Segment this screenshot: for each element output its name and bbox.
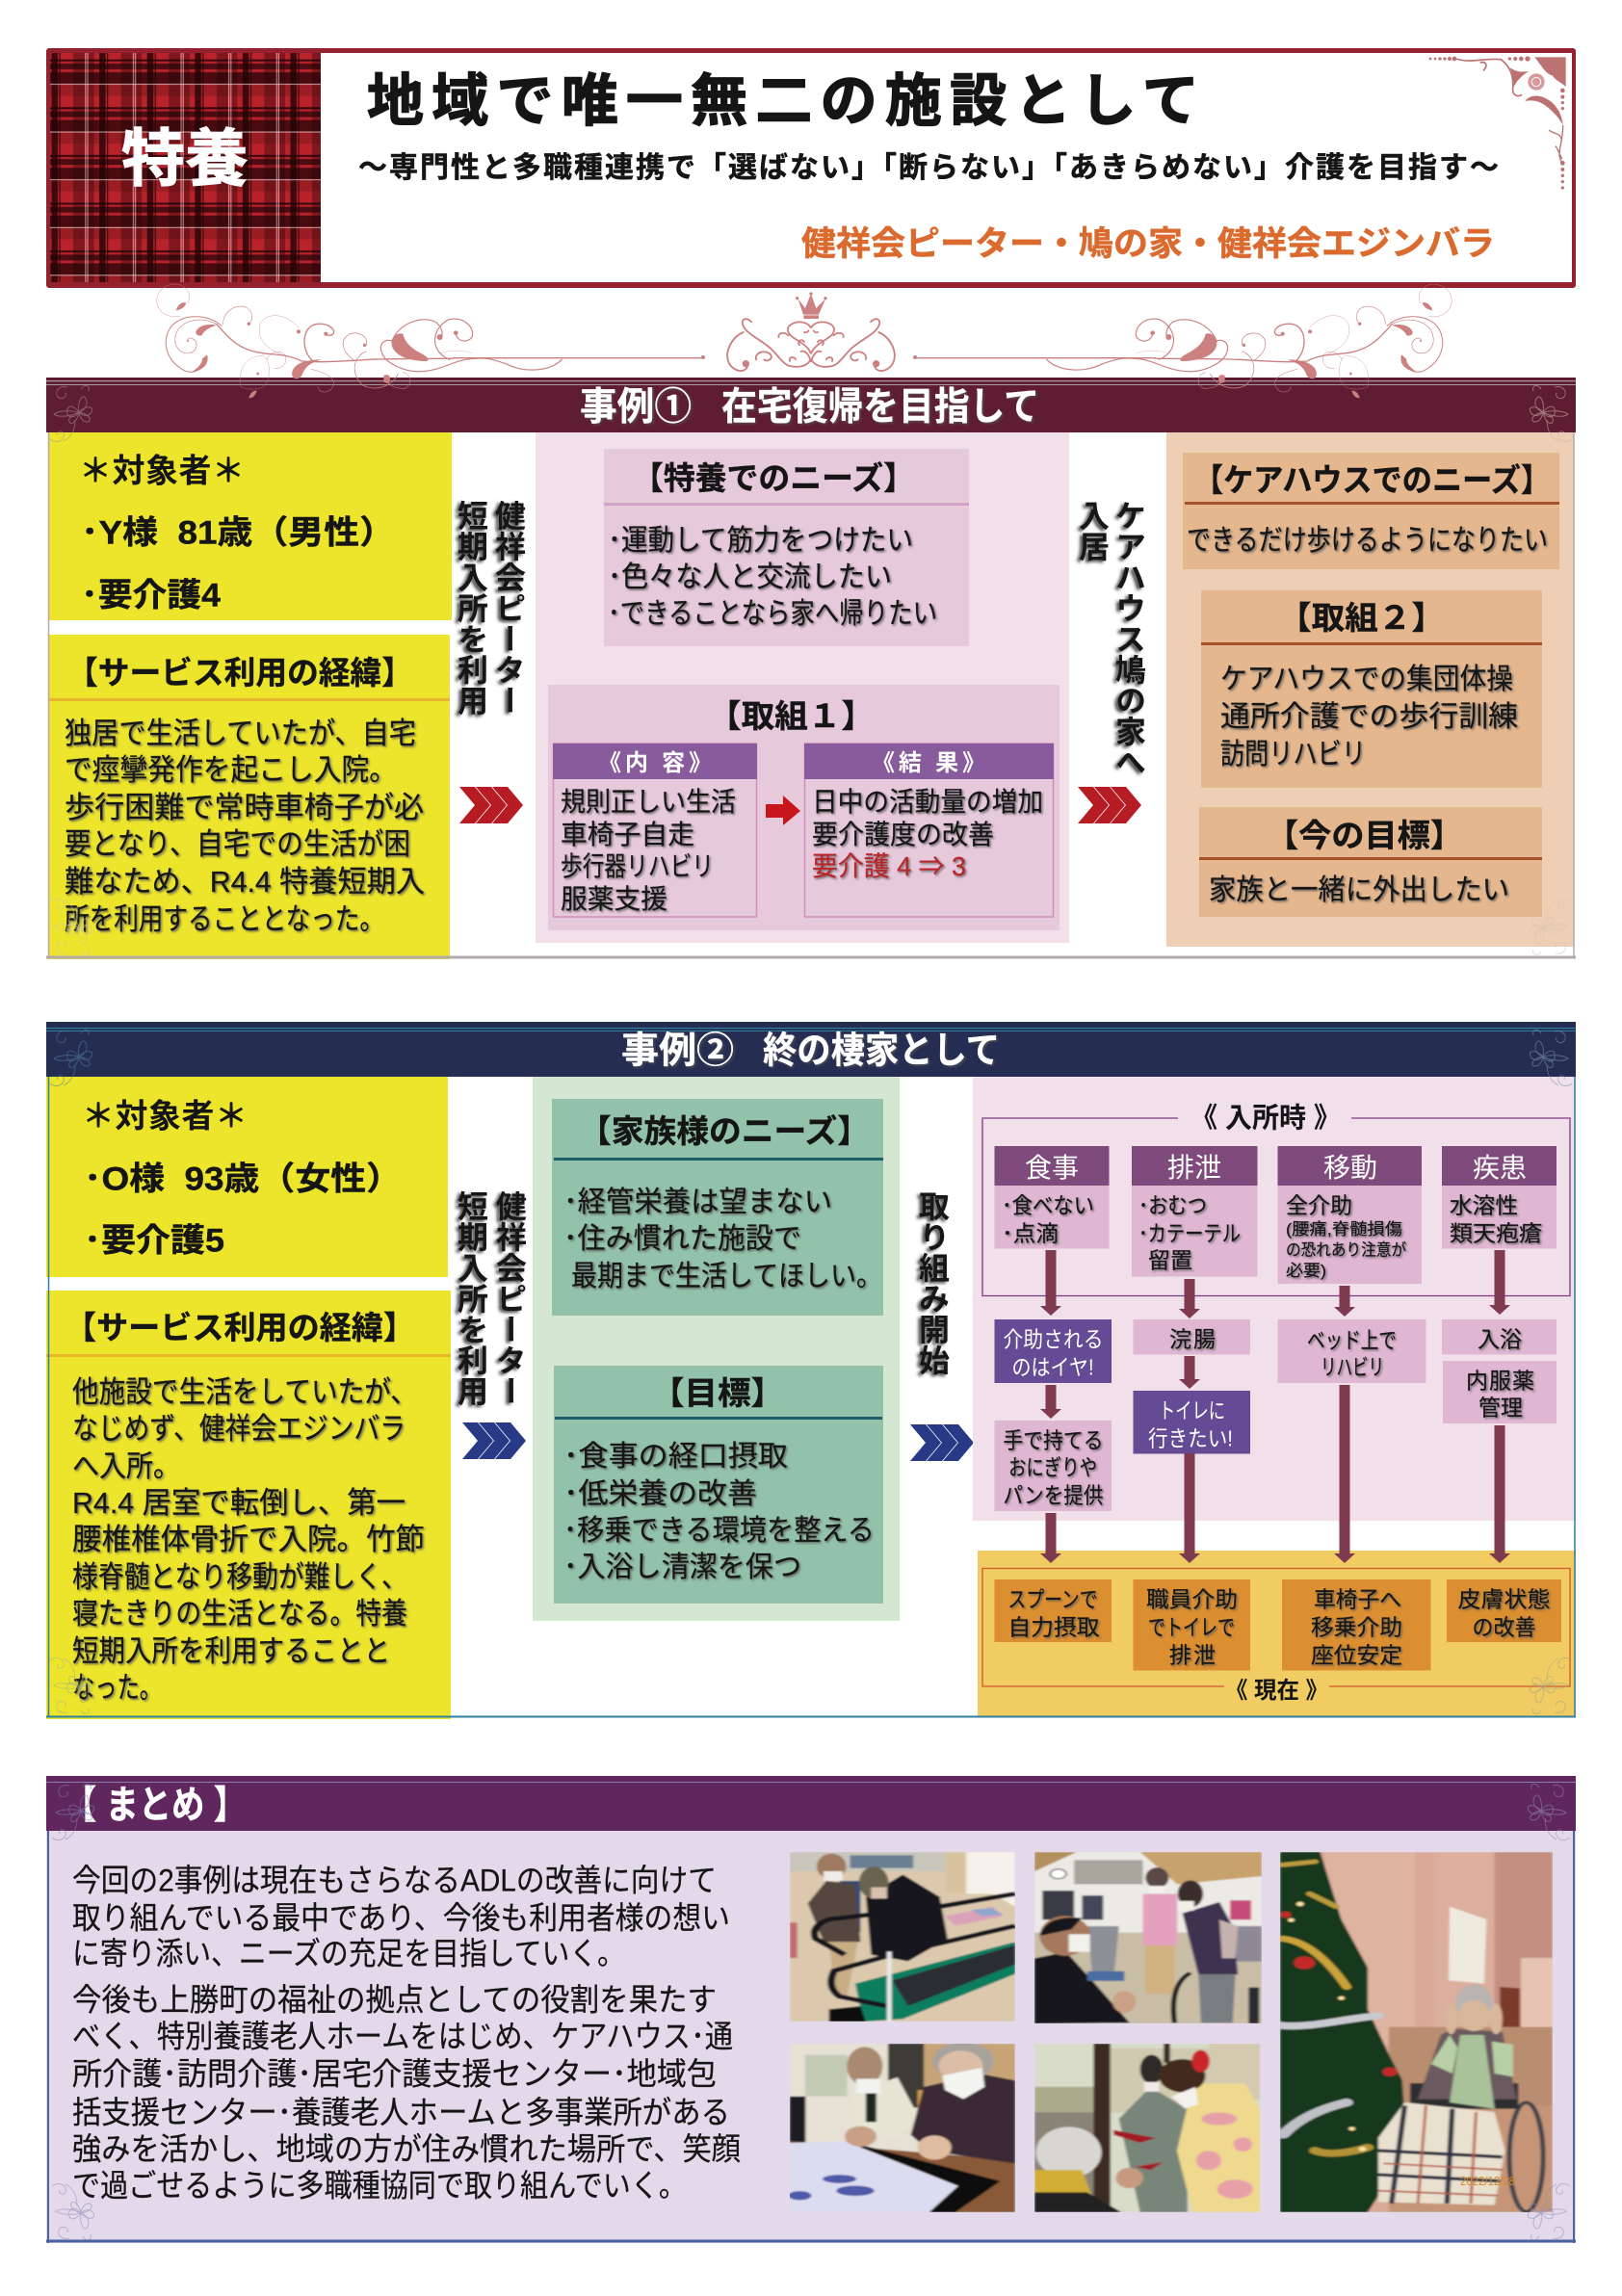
panel: family needs and goals [533,1077,900,1621]
effort 2 [1201,590,1542,788]
step: bed rehab [1277,1319,1426,1383]
result: transfer [1282,1579,1431,1670]
effort 2: 訪問リハビリ [1220,739,1366,770]
summary text: で過ごせるように多職種協同で取り組んでいく。 [72,2169,687,2204]
section 1 heading band: 事例① [580,385,692,428]
step: wants toilet [1133,1391,1250,1454]
column: mobility: 移動 [1323,1153,1377,1183]
vertical label: short stay [454,500,526,716]
needs box: ･運動して筋力をつけたい [608,525,913,557]
photo: touch table activity [790,2044,1015,2212]
summary text: べく、特別養護老人ホームをはじめ、ケアハウス･通 [72,2019,733,2053]
heading band: 【 まとめ 】 [64,1784,247,1826]
summary frame [46,1831,1576,2243]
column: excretion: 排泄 [1167,1153,1221,1183]
effort 2: ケアハウスでの集団体操 [1220,664,1513,695]
step: hand-held food: 手で持てる [1004,1427,1104,1452]
step: bathing [1442,1319,1557,1354]
summary text: 今後も上勝町の福祉の拠点としての役割を果たす [72,1982,717,2017]
panel background [46,1831,1576,2243]
goals: 【目標】 [651,1375,784,1411]
result card: 日中の活動量の増加 [812,787,1043,817]
summary text: 括支援センター･養護老人ホームと多事業所がある [72,2096,730,2130]
panel: service history: 独居で生活していたが、自宅 [65,717,416,750]
family needs: 最期まで生活してほしい。 [571,1261,882,1292]
photo: christmas tree and resident [1280,1852,1553,2212]
effort 1 box: 【取組１】 [708,698,875,734]
contents card: 服薬支援 [561,884,667,914]
vertical label: care house: ケアハウス鳩の家へ [1112,500,1146,777]
vertical label: short stay: 短期入所を利用 [454,500,488,716]
panel: target person [46,1077,448,1277]
vertical label: short stay: 健祥会ピーター [491,500,526,716]
step: wants toilet: 行きたい! [1148,1425,1233,1450]
crown and central scroll [701,292,917,371]
family needs [552,1099,883,1316]
column: illness [1442,1146,1557,1248]
summary text: に寄り添い、ニーズの充足を目指していく。 [72,1936,625,1970]
column: meals [994,1146,1110,1248]
panel: service history: 腰椎椎体骨折で入院。竹節 [72,1523,425,1556]
current goal [1199,807,1542,917]
step: hand-held food [994,1421,1112,1511]
panel: service history: 他施設で生活をしていたが、 [72,1375,417,1409]
photo date stamp: 2022/12/28 [1460,2174,1515,2188]
vertical label: short stay: 健祥会ピーター [492,1190,527,1406]
result: spoon [994,1579,1112,1642]
summary text: 今回の2事例は現在もさらなるADLの改善に向けて [72,1863,717,1897]
panel: service history [48,635,450,959]
panel: service history: 【サービス利用の経緯】 [66,655,413,691]
effort 2: 通所介護での歩行訓練 [1220,701,1518,733]
panel: service history: へ入所。 [72,1449,180,1483]
header banner [46,48,1576,288]
panel: service history: 短期入所を利用することと [72,1634,390,1668]
step: medication: 内服薬 [1466,1368,1534,1393]
panel: target person: ･要介護5 [84,1223,224,1260]
photo: staff with visitor [1034,1852,1262,2023]
result card: 《結 果》 [872,750,985,776]
plaid category panel: 特養 [121,123,249,194]
goals: ･移乗できる環境を整える [563,1515,875,1547]
step: bed rehab: ベッド上で [1307,1327,1397,1352]
section 1 heading band: 在宅復帰を目指して [721,385,1039,428]
panel: care house peach [1166,432,1574,947]
column: excretion [1132,1146,1258,1277]
panel: service history: 要となり、自宅での生活が困 [65,827,410,861]
family needs: 【家族様のニーズ】 [579,1113,870,1149]
needs box: ･色々な人と交流したい [608,561,892,593]
step: bed rehab: リハビリ [1321,1354,1384,1379]
current goal: 家族と一緒に外出したい [1209,874,1509,906]
column: excretion: ･おむつ [1138,1192,1207,1217]
panel: service history: R4.4 居室で転倒し、第一 [72,1486,406,1520]
column: mobility: 必要) [1286,1262,1326,1280]
flow arrows [1040,1250,1510,1563]
goals: ･入浴し清潔を保つ [563,1552,801,1583]
step: dislikes assistance [994,1319,1112,1383]
arrow: navy chevrons [910,1424,974,1461]
panel: service history: なった。 [72,1671,162,1705]
result: skin [1447,1579,1561,1642]
section 1 case panel [46,385,1576,959]
contents card [553,744,757,917]
panel: target person: ＊対象者＊ [79,453,245,489]
panel: service history: 【サービス利用の経緯】 [65,1310,415,1345]
heading band: 終の棲家として [763,1031,1000,1071]
result card: 要介護度の改善 [812,820,994,849]
column: mobility: 全介助 [1286,1192,1352,1217]
step: hand-held food: おにぎりや [1008,1454,1097,1479]
effort 1 box [548,685,1060,930]
result card: 要介護 4 ⇒ 3 [812,851,966,881]
panel: service history [46,1291,451,1719]
current goal: 【今の目標】 [1266,818,1463,853]
column: mobility: (腰痛,脊髄損傷 [1286,1220,1402,1239]
result: toilet: でトイレで [1148,1614,1235,1639]
contents card: 車椅子自走 [561,820,694,849]
result: transfer: 座位安定 [1311,1643,1402,1668]
contents card: 歩行器リハビリ [561,851,714,881]
panel: service history: で痙攣発作を起こし入院。 [65,753,397,787]
panel: target person: ･Y様 81歳（男性） [81,514,395,551]
result: toilet: 職員介助 [1146,1587,1238,1612]
section 1 frame [46,432,1576,958]
panel: tokuyo pink [536,432,1069,943]
result: transfer: 移乗介助 [1311,1614,1402,1639]
panel: target person: ･O様 93歳（女性） [84,1161,402,1198]
column: meals: ･点滴 [1002,1221,1059,1246]
step: dislikes assistance: のはイヤ! [1011,1354,1094,1379]
panel: service history: 難なため、R4.4 特養短期入 [65,865,425,899]
step: medication [1443,1361,1557,1423]
vertical label: short stay [454,1190,527,1406]
step: bathing: 入浴 [1478,1327,1522,1352]
needs box [604,449,969,646]
arrow: navy chevrons [462,1422,526,1459]
column: meals: ･食べない [1002,1192,1094,1217]
step: wants toilet: トイレに [1159,1398,1225,1423]
arrow: red chevrons [1078,787,1141,823]
panel: target person: ＊対象者＊ [82,1098,248,1135]
vertical label: care house [1075,500,1146,777]
result: toilet: 排泄 [1169,1643,1216,1668]
step: medication: 管理 [1478,1395,1523,1420]
panel: current state yellow [978,1551,1576,1717]
step: dislikes assistance: 介助される [1004,1327,1104,1352]
vertical label: short stay: 短期入所を利用 [454,1190,488,1406]
panel: service history: 歩行困難で常時車椅子が必 [65,791,424,824]
photo: kimono visit [1034,2044,1260,2212]
plaid category panel [50,53,321,282]
result: spoon: スプーンで [1007,1587,1098,1612]
arrow: red chevrons [459,787,523,823]
panel: service history: なじめず、健祥会エジンバラ [72,1412,406,1446]
heading band [46,1776,1576,1831]
goals [554,1366,883,1604]
summary section [46,1776,1576,2243]
summary text: 所介護･訪問介護･居宅介護支援センター･地域包 [72,2057,717,2092]
column: illness: 疾患 [1473,1153,1527,1183]
section 2 case panel [46,1022,1576,1719]
column: illness: 類天疱瘡 [1450,1221,1542,1246]
summary text: 取り組んでいる最中であり、今後も利用者様の想い [72,1901,730,1936]
needs box: ･できることなら家へ帰りたい [608,598,937,630]
result: skin: 皮膚状態 [1458,1587,1551,1612]
main title: 地域で唯一無二の施設として [367,69,1199,133]
section 1 heading band [46,378,1576,432]
photo: treadmill training [790,1852,1015,2022]
panel: current state yellow: 《 現在 》 [1225,1678,1328,1704]
column: excretion: ･カテーテル [1138,1221,1241,1246]
step: hand-held food: パンを提供 [1004,1483,1104,1508]
panel: at admission pink [973,1077,1576,1521]
care house needs: できるだけ歩けるようになりたい [1187,525,1548,557]
corner ornament [1429,56,1566,190]
result: toilet [1133,1579,1250,1670]
column: mobility: の恐れあり注意が [1286,1240,1406,1260]
column: mobility [1277,1146,1422,1284]
family needs: ･経管栄養は望まない [563,1187,832,1218]
result: spoon: 自力摂取 [1007,1614,1100,1639]
panel: service history: 様脊髄となり移動が難しく、 [72,1560,407,1594]
panel: target person: ･要介護4 [81,578,221,614]
vertical label: start of effort: 取り組み開始 [915,1190,950,1375]
needs box: 【特養でのニーズ】 [632,460,915,496]
family needs: ･住み慣れた施設で [563,1223,801,1255]
care house needs [1183,453,1559,569]
column: illness: 水溶性 [1450,1192,1518,1217]
summary text: 強みを活かし、地域の方が住み慣れた場所で、笑顔 [72,2132,741,2167]
goals: ･低栄養の改善 [563,1478,757,1510]
panel: at admission pink: 《 入所時 》 [1190,1102,1341,1135]
arrow: red right [766,796,800,825]
panel: service history: 所を利用することとなった。 [65,902,384,936]
heading band: 事例② [621,1031,734,1071]
step: enema: 浣腸 [1169,1327,1216,1352]
care house needs: 【ケアハウスでのニーズ】 [1193,462,1551,498]
column: excretion: 留置 [1148,1248,1192,1273]
result: transfer: 車椅子へ [1314,1587,1401,1612]
effort 2: 【取組２】 [1278,600,1445,636]
result: skin: の改善 [1472,1614,1535,1639]
result card [804,744,1054,917]
column: meals: 食事 [1025,1153,1079,1183]
subtitle: ～専門性と多職種連携で「選ばない」「断らない」「あきらめない」介護を目指す～ [358,152,1499,184]
step: enema [1133,1319,1250,1354]
heading band [46,1022,1576,1077]
section 2 frame [46,1077,1576,1717]
goals: ･食事の経口摂取 [563,1441,788,1473]
contents card: 規則正しい生活 [561,787,736,817]
contents card: 《内 容》 [598,750,712,776]
panel: target person [48,432,452,620]
vertical label: care house: 入居 [1075,500,1110,561]
divider ornament [157,284,1452,398]
facility names: 健祥会ピーター・鳩の家・健祥会エジンバラ [801,225,1495,263]
summary text [72,1863,741,2204]
panel: service history: 寝たきりの生活となる。特養 [72,1597,407,1631]
